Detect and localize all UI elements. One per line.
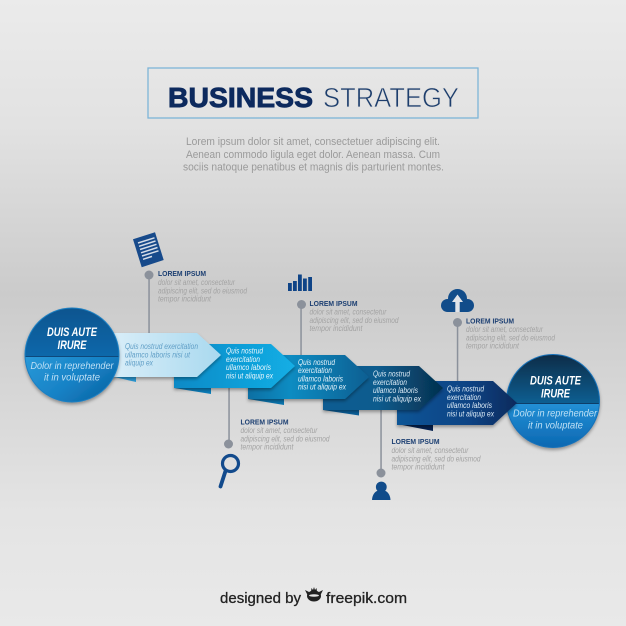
- arrow step 4: ullamco laboris: [373, 385, 418, 395]
- arrow step 2: [174, 344, 295, 394]
- right circle: [505, 354, 601, 450]
- arrow step 2: ullamco laboris: [226, 362, 271, 372]
- arrow step 5: [397, 381, 517, 431]
- footer credit: designed by: [220, 590, 301, 607]
- footer credit: [220, 587, 407, 607]
- arrow step 1: Quis nostrud exercitation: [125, 341, 198, 351]
- right circle text: it in voluptate: [528, 420, 583, 432]
- arrow step 2: exercitation: [226, 354, 260, 364]
- arrow step 3: [248, 355, 369, 405]
- icon: cloud upload: [441, 289, 474, 312]
- icon: magnifier: [220, 456, 238, 486]
- intro text: Lorem ipsum dolor sit amet, consectetuer adipiscing elit.: [186, 136, 440, 148]
- arrow step 1: aliquip ex: [125, 358, 154, 368]
- arrow step 5: Quis nostrud: [447, 384, 484, 394]
- info block 5: tempor incididunt: [392, 462, 445, 472]
- right circle text: [513, 376, 597, 432]
- info block 2: tempor incididunt: [310, 324, 363, 333]
- arrow step 4: nisi ut aliquip ex: [373, 393, 422, 403]
- info block 1: tempor incididunt: [158, 294, 212, 304]
- icon: document: [133, 232, 164, 267]
- info block 5: dolor sit amet, consectetur: [392, 446, 469, 455]
- info block 3: LOREM IPSUM: [466, 316, 514, 326]
- info block 1: LOREM IPSUM: [158, 269, 206, 278]
- icon: bar chart: [288, 274, 312, 291]
- info block 4: dolor sit amet, consectetur: [240, 426, 318, 435]
- intro text: [183, 136, 444, 174]
- title: STRATEGY: [323, 82, 459, 113]
- left circle: [24, 308, 120, 402]
- info block 3: tempor incididunt: [466, 342, 520, 350]
- left circle text: DUIS AUTE: [47, 327, 97, 339]
- arrow step 4: exercitation: [373, 377, 407, 387]
- arrow step 3: nisi ut aliquip ex: [298, 382, 347, 392]
- arrow step 4: Quis nostrud: [373, 368, 410, 378]
- arrow step 3: Quis nostrud: [298, 357, 335, 367]
- connector lines: [144, 270, 462, 478]
- info block 2: adipiscing elit, sed do eiusmod: [310, 316, 399, 325]
- info block 1: dolor sit amet, consectetur: [158, 278, 235, 287]
- info block 2: [310, 299, 399, 333]
- arrow step 1: [105, 333, 221, 382]
- left circle text: it in voluptate: [44, 372, 100, 384]
- arrow step 3: exercitation: [298, 365, 332, 375]
- arrow step 4: [323, 366, 443, 416]
- title: BUSINESS: [168, 82, 313, 113]
- info block 2: dolor sit amet, consectetur: [310, 308, 387, 316]
- info block 4: adipiscing elit, sed do eiusmod: [240, 434, 330, 443]
- right circle text: Dolor in reprehender: [513, 408, 597, 420]
- intro text: sociis natoque penatibus et magnis dis parturient montes.: [183, 162, 444, 174]
- left circle text: IRURE: [58, 340, 87, 352]
- arrow step 5: ullamco laboris: [447, 400, 492, 410]
- left circle text: [30, 327, 114, 384]
- info block 4: [240, 418, 330, 452]
- arrow step 2: Quis nostrud: [226, 346, 263, 356]
- info block 1: [158, 269, 248, 304]
- left circle text: Dolor in reprehender: [30, 360, 114, 372]
- arrow step 5: nisi ut aliquip ex: [447, 408, 495, 418]
- arrow step 1: ullamco laboris nisi ut: [125, 349, 191, 359]
- info block 4: LOREM IPSUM: [240, 418, 288, 426]
- arrow step 5: exercitation: [447, 392, 481, 402]
- info block 3: dolor sit amet, consectetur: [466, 325, 543, 334]
- info block 3: [466, 316, 556, 350]
- footer credit: freepik.com: [326, 590, 407, 607]
- right circle text: IRURE: [541, 388, 570, 400]
- icon: person: [372, 482, 390, 500]
- arrow step 3: ullamco laboris: [298, 373, 343, 383]
- info block 3: adipiscing elit, sed do eiusmod: [466, 333, 556, 342]
- info block 5: LOREM IPSUM: [392, 437, 440, 446]
- arrow step 2: nisi ut aliquip ex: [226, 370, 274, 380]
- info block 4: tempor incididunt: [240, 442, 294, 452]
- info block 1: adipiscing elit, sed do eiusmod: [158, 286, 248, 295]
- title: [148, 68, 478, 118]
- right circle text: DUIS AUTE: [530, 376, 581, 388]
- info block 5: adipiscing elit, sed do eiusmod: [392, 454, 481, 463]
- info block 2: LOREM IPSUM: [310, 299, 358, 308]
- intro text: Aenean commodo ligula eget dolor. Aenean massa. Cum: [186, 149, 440, 161]
- info block 5: [392, 437, 481, 472]
